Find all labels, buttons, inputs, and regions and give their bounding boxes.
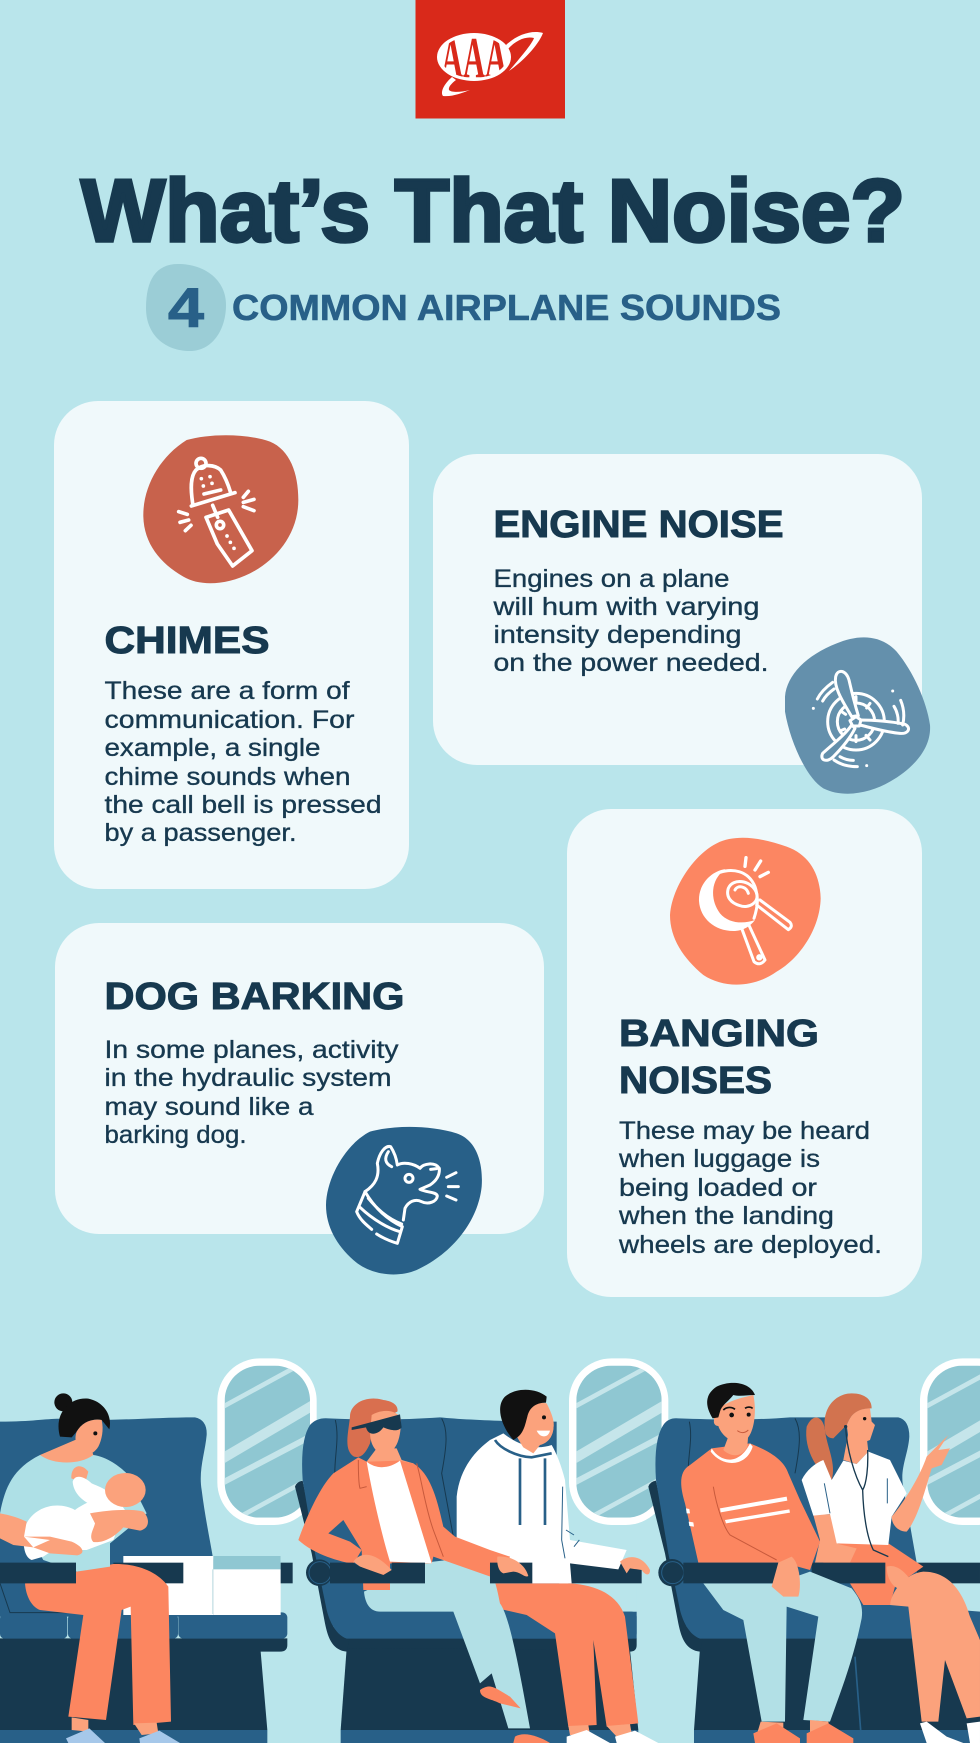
body text: barking dog. xyxy=(104,1121,246,1149)
passenger: woman with earphones xyxy=(802,1393,980,1743)
heading: CHIMES xyxy=(104,620,270,662)
seat row 3 xyxy=(648,1417,980,1743)
body text: example, a single xyxy=(104,734,320,762)
passenger: man in white hoodie xyxy=(457,1390,658,1743)
body text xyxy=(104,677,382,847)
body text: chime sounds when xyxy=(104,763,350,791)
window 1 xyxy=(217,1358,317,1525)
seat row 2 xyxy=(295,1417,642,1743)
body text: when the landing xyxy=(618,1202,834,1230)
panel: engine noise xyxy=(433,454,930,794)
icon: propeller xyxy=(785,637,930,794)
heading: DOG BARKING xyxy=(104,976,404,1018)
subtitle with number badge xyxy=(146,264,781,351)
heading: ENGINE NOISE xyxy=(494,504,784,546)
icon: barking dog xyxy=(326,1127,482,1274)
body text: communication. For xyxy=(104,706,354,734)
heading: BANGING xyxy=(619,1013,819,1055)
AAA logo: AAA xyxy=(441,25,507,90)
panel: dog barking xyxy=(55,923,544,1274)
subtitle with number badge: 4 xyxy=(168,276,204,339)
body text: wheels are deployed. xyxy=(618,1231,882,1259)
body text: being loaded or xyxy=(619,1174,817,1202)
body text xyxy=(618,1117,882,1259)
heading xyxy=(619,1013,819,1102)
illustration: airplane cabin with passengers xyxy=(0,1358,980,1743)
panel: chimes xyxy=(54,401,409,889)
window 3 xyxy=(920,1358,980,1525)
AAA logo xyxy=(416,0,565,118)
body text: on the power needed. xyxy=(494,649,768,677)
body text: by a passenger. xyxy=(104,819,296,847)
passenger: woman with sleep mask xyxy=(298,1399,550,1743)
passenger: mother and baby xyxy=(0,1393,180,1743)
passenger: man in orange sweater xyxy=(658,1383,862,1743)
body text: the call bell is pressed xyxy=(104,791,382,819)
seat row 1 xyxy=(0,1417,293,1743)
body text: in the hydraulic system xyxy=(104,1064,392,1092)
body text: These may be heard xyxy=(619,1117,870,1145)
body text: Engines on a plane xyxy=(494,565,730,593)
window 2 xyxy=(569,1358,668,1525)
body text: These are a form of xyxy=(104,677,350,705)
icon: pan and spoon xyxy=(670,838,821,985)
heading: NOISES xyxy=(619,1060,772,1102)
armrest with knob xyxy=(306,1556,532,1586)
body text: may sound like a xyxy=(104,1093,314,1121)
subtitle with number badge: COMMON AIRPLANE SOUNDS xyxy=(232,287,781,328)
panel: banging noises xyxy=(567,809,922,1297)
body text xyxy=(104,1036,399,1149)
title: What’s That Noise? xyxy=(81,161,905,260)
body text: In some planes, activity xyxy=(104,1036,399,1064)
body text: will hum with varying xyxy=(492,593,760,621)
icon: bell chime xyxy=(143,435,298,583)
body text: intensity depending xyxy=(494,621,742,649)
body text: when luggage is xyxy=(618,1145,820,1173)
body text xyxy=(492,565,768,677)
